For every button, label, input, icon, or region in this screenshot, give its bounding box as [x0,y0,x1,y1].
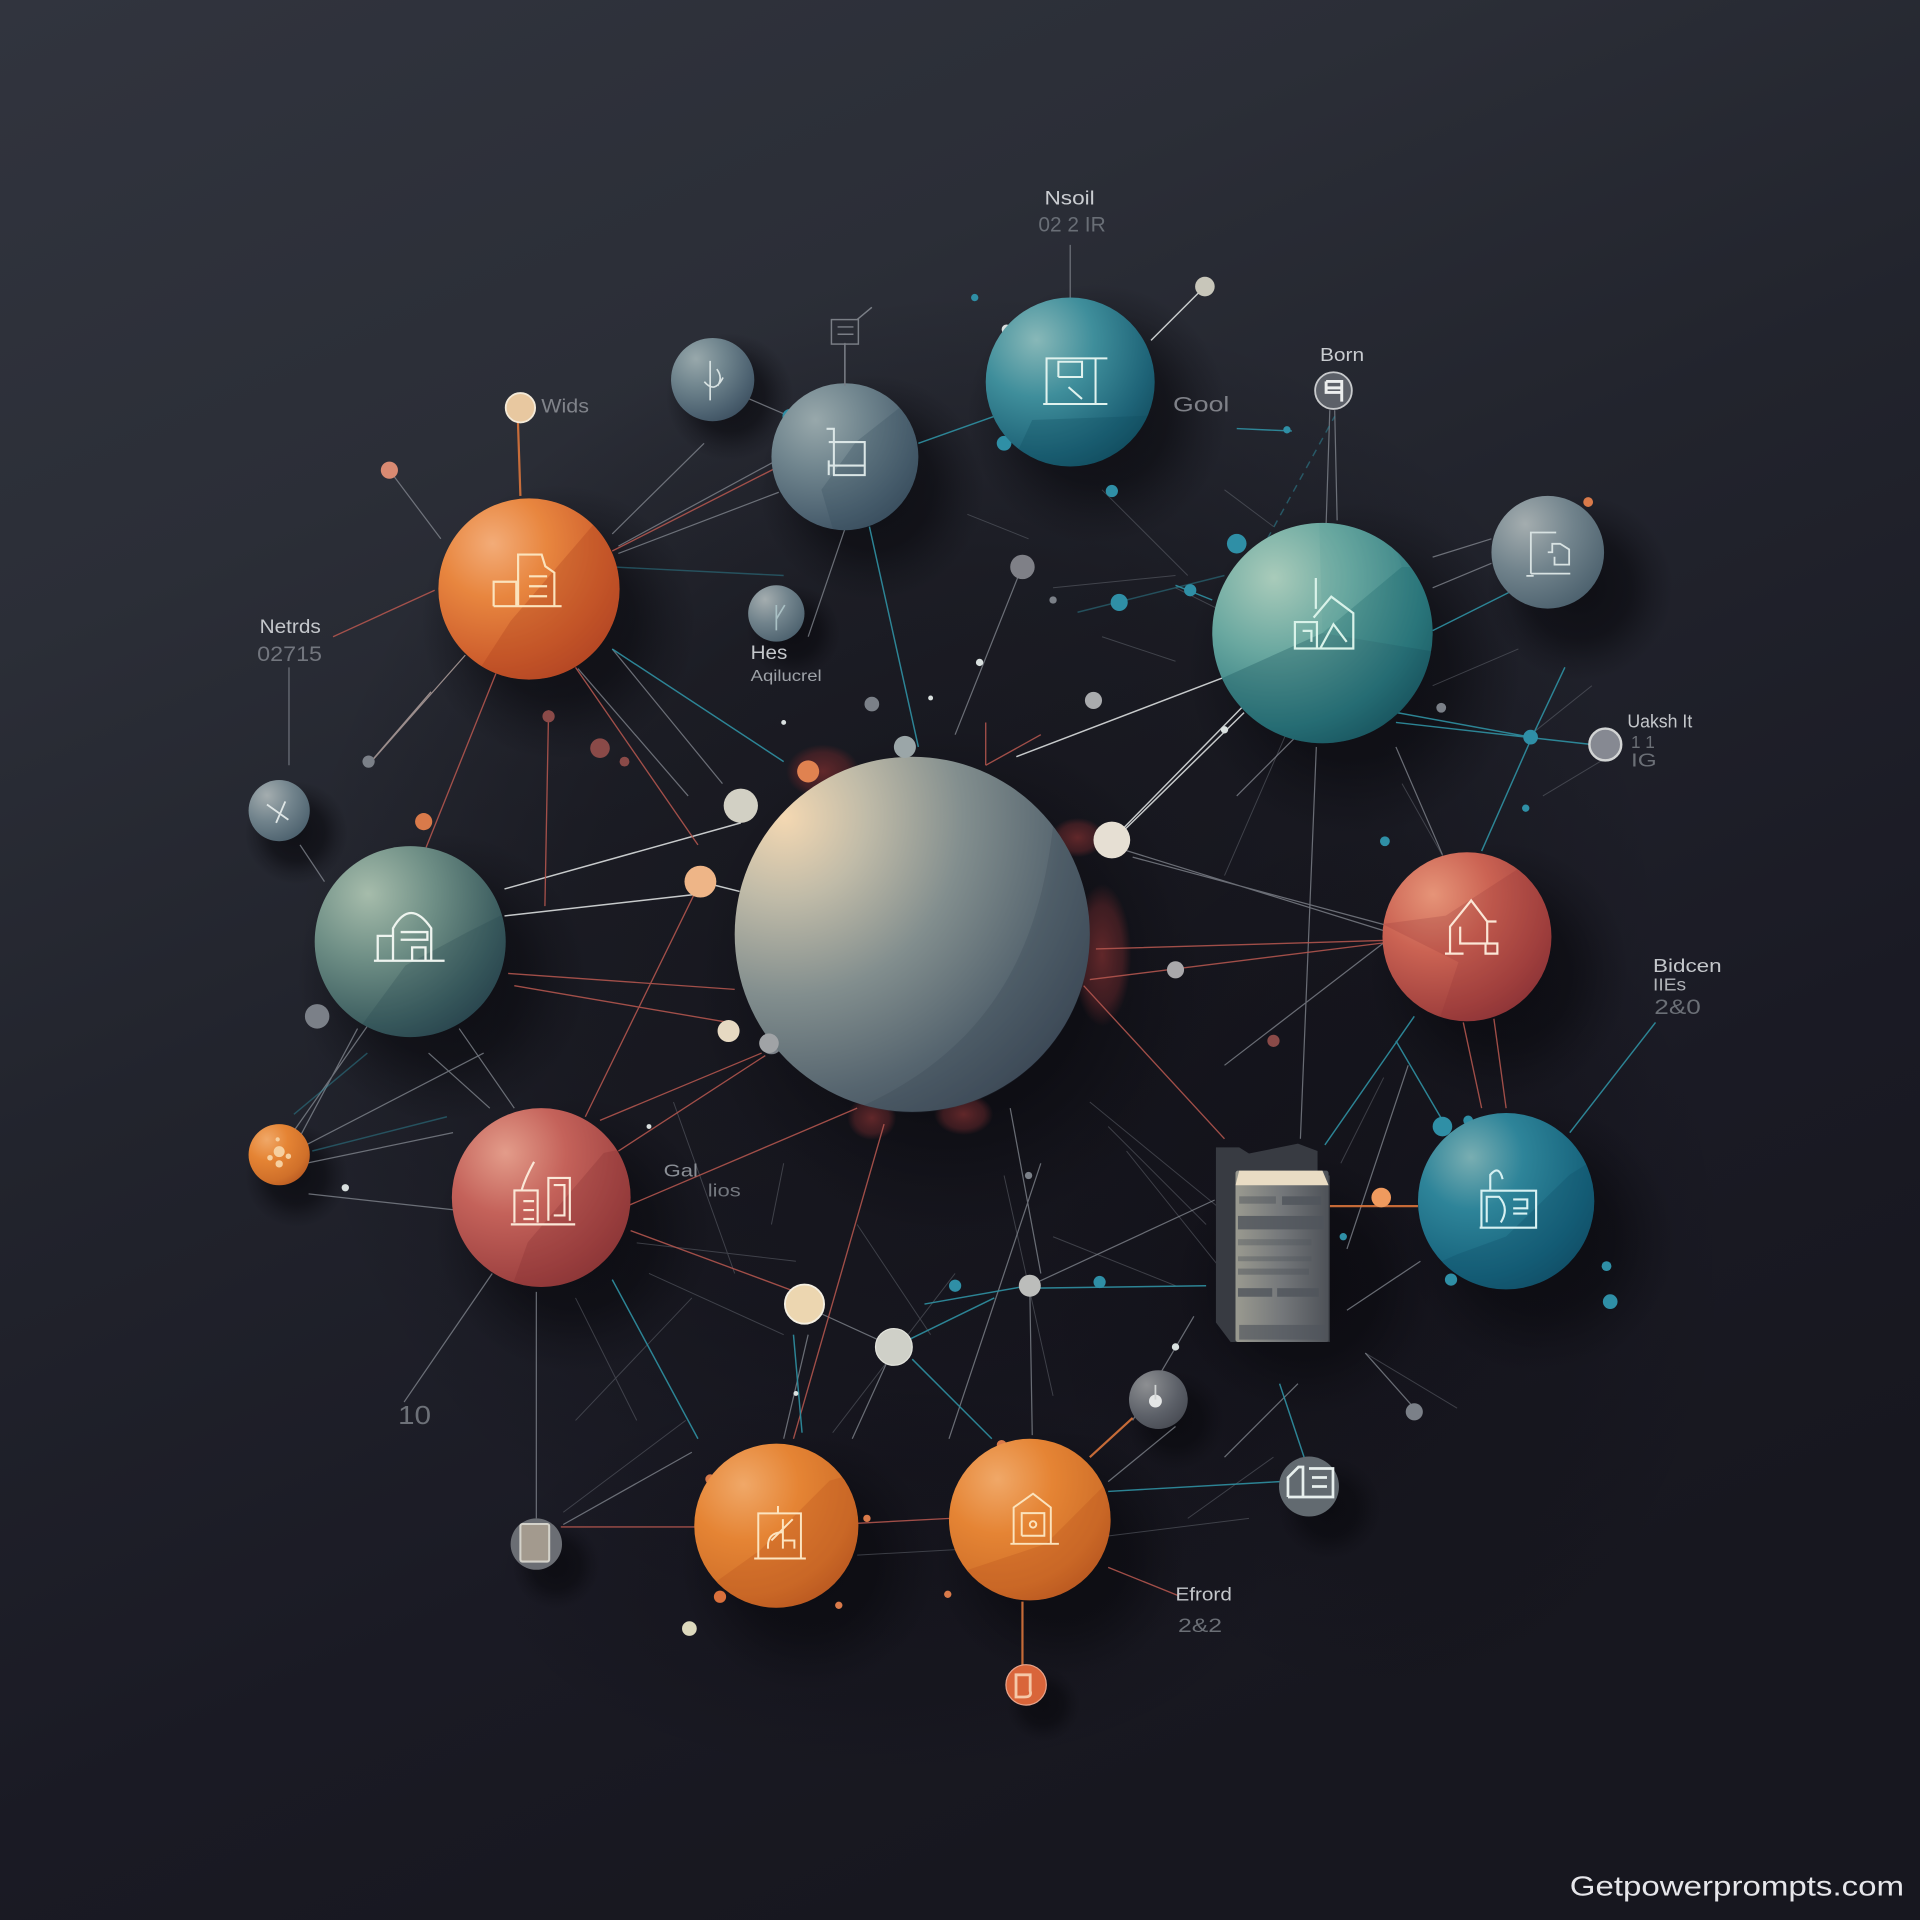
icon: card [1480,1170,1536,1228]
sphere: red left [452,1108,631,1287]
connection lines: white [504,287,1244,916]
sphere: small orange left [249,1124,310,1185]
sphere: teal top [986,298,1155,466]
connector nodes [381,277,1621,1636]
sphere: slate top [771,383,918,530]
icon: house [1295,578,1353,648]
connection lines: pale [370,655,465,763]
icon: roof [1445,900,1497,954]
scattered small dots [305,294,1618,1609]
connection lines: red [333,465,1506,1596]
label: Gal / lios: Gal [664,1161,698,1181]
label: Efrord: 2&2 [1178,1615,1222,1637]
central hub sphere [735,757,1090,1113]
sphere: orange top left [438,498,620,680]
label: Netrds: Netrds [260,616,321,638]
node: gray icon orb [1279,1457,1339,1517]
network shadow glow [294,294,1727,1776]
label: Netrds [257,616,322,666]
icon: shelves [511,1162,575,1224]
label: 10: 10 [398,1402,431,1430]
label: Bidcen [1653,955,1722,1019]
connection lines: orange [518,422,1418,1668]
icon: building [494,555,562,606]
label: Efrord: Efrord [1176,1583,1232,1604]
node: gray square orb [511,1518,562,1570]
sphere: green [314,846,506,1038]
node: small icon top right [1315,372,1352,409]
label: Uaksh [1627,710,1692,771]
sphere shadows [245,284,1675,1741]
connection lines: teal [294,416,1656,1491]
label: Bidcen: 2&0 [1654,996,1701,1019]
sphere: slate right [1491,496,1604,609]
sphere: orange bottom left [694,1444,858,1608]
sphere: small slate top [671,338,754,421]
label: Efrord [1176,1583,1232,1637]
icon: panel [827,429,865,475]
label: Hes: Aqilucrel [751,668,822,685]
server box [1216,1144,1330,1342]
sphere: blue [1418,1113,1594,1290]
label: Uaksh: IG [1631,750,1657,771]
label: Bidcen: IIEs [1653,975,1686,995]
sphere: orange bottom right [948,1438,1111,1600]
faint background lines [563,490,1604,1555]
label: Hes: Hes [751,642,788,664]
connection lines: gray [289,245,1491,1524]
label: Netrds: 02715 [257,643,322,666]
label: Bidcen: Bidcen [1653,955,1722,976]
label: Gal / lios [664,1161,741,1200]
label: Uaksh: 1 1 [1631,732,1655,752]
label: Nsoil [1038,187,1106,236]
icon: arch [374,913,445,961]
dark red smears around hub [786,744,1131,1140]
label: Born: Born [1320,344,1364,365]
sphere: small slate left [249,780,310,841]
label: Gool: Gool [1173,393,1229,416]
label: Hes [751,642,822,685]
node: orange bottom [1006,1665,1046,1705]
icon: frame [754,1506,806,1559]
sphere: small slate centre [748,585,804,642]
sphere: teal large [1212,522,1433,744]
label: Nsoil: 02 2 IR [1038,213,1106,236]
node: gray orb [1129,1370,1188,1429]
small outline icon: top [831,307,872,386]
watermark: Getpowerprompts.com [1570,1871,1904,1902]
icon: frame [1043,358,1107,404]
icon: house [1010,1494,1059,1544]
label: Wids: Wids [541,396,589,418]
label: Gal / lios: lios [708,1180,741,1200]
sphere: red right [1382,852,1552,1022]
label: Uaksh: Uaksh It [1627,710,1692,731]
label: Nsoil: Nsoil [1044,187,1095,209]
